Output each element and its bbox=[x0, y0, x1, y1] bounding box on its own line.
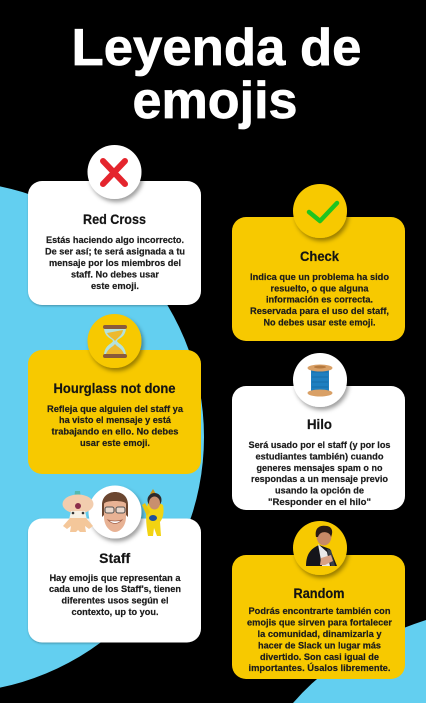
heading: Hilo: Hilo bbox=[307, 417, 332, 432]
text: Random description: emojis que sirven para fortalecer bbox=[247, 618, 392, 628]
text: Staff description: contexto, up to you. bbox=[72, 607, 158, 617]
panel: Hourglass not done bbox=[28, 314, 201, 474]
panel: Hilo bbox=[232, 353, 405, 510]
text: Hilo description: "Responder en el hilo" bbox=[268, 497, 371, 507]
icon: hourglass bbox=[103, 325, 127, 358]
text: Check description: resuelto, o que alguna bbox=[270, 284, 369, 294]
background shape: blue circle left bbox=[0, 181, 204, 693]
background shape: blue corner bottom right bbox=[293, 620, 426, 703]
icon: red cross bbox=[103, 161, 125, 184]
text: Red Cross description: Estás haciendo algo incorrecto. bbox=[46, 235, 184, 245]
text: Check description: Indica que un problema ha sido bbox=[250, 272, 389, 282]
text: Random description: importantes. Úsalos libremente. bbox=[248, 662, 390, 673]
heading: Red Cross: Red Cross bbox=[83, 212, 146, 227]
text: Red Cross description: staff. No debes usar bbox=[71, 270, 159, 280]
text: Random description: hacer de Slack un lugar más bbox=[258, 640, 381, 650]
text: Hourglass description bbox=[47, 404, 184, 448]
text: Random description: la comunidad, dinamizarla y bbox=[258, 629, 382, 639]
text: Red Cross description: De ser así; te será asignada a tu bbox=[45, 246, 185, 256]
text: Hourglass description: usar este emoji. bbox=[80, 438, 150, 448]
text: Hourglass description: trabajando en ello. No debes bbox=[52, 426, 178, 436]
title bbox=[72, 19, 362, 130]
panel: Staff bbox=[28, 486, 201, 642]
text: Hilo description: usando la opción de bbox=[275, 486, 364, 496]
icon: green check bbox=[309, 203, 337, 221]
text: Check description: Reservada para el uso del staff, bbox=[250, 306, 389, 316]
text: Hourglass description: Refleja que alguien del staff ya bbox=[47, 404, 184, 414]
text: Red Cross description: este emoji. bbox=[91, 281, 139, 291]
text: Hilo description: respondas a un mensaje previo bbox=[251, 474, 388, 484]
title: emojis bbox=[132, 72, 298, 130]
icon: banana costume character bbox=[142, 489, 164, 536]
text: Red Cross description bbox=[45, 235, 185, 291]
panel: Check bbox=[232, 184, 405, 341]
heading: Random: Random bbox=[294, 586, 344, 601]
text: Check description bbox=[250, 272, 389, 328]
text: Random description: Podrás encontrarte también con bbox=[248, 606, 391, 616]
text: Hilo description: Será usado por el staff (y por los bbox=[248, 440, 390, 450]
panel: Red Cross bbox=[28, 145, 201, 305]
icon: genie character bbox=[62, 491, 94, 532]
text: Staff description: diferentes usos según el bbox=[62, 596, 168, 606]
text: Hilo description: estudiantes también) cuando bbox=[256, 452, 384, 462]
text: Check description: información es correcta. bbox=[266, 294, 373, 304]
heading: Check: Check bbox=[300, 249, 339, 264]
text: Random description bbox=[247, 606, 392, 673]
text: Staff description: cada uno de los Staff's, tienen bbox=[49, 584, 181, 594]
text: Check description: No debes usar este emoji. bbox=[264, 318, 376, 328]
icon: staff face with glasses bbox=[102, 492, 128, 532]
icon: thread spool bbox=[308, 364, 332, 396]
panel: Random bbox=[232, 521, 405, 679]
text: Hilo description bbox=[248, 440, 390, 507]
icon: man pointing in suit bbox=[306, 526, 337, 566]
text: Random description: divertido. Son casi igual de bbox=[260, 652, 379, 662]
text: Hourglass description: ha visto el mensaje y está bbox=[59, 415, 172, 425]
text: Hilo description: generes mensajes spam o no bbox=[256, 463, 383, 473]
heading: Staff: Staff bbox=[99, 551, 131, 566]
text: Red Cross description: mensaje por los miembros del bbox=[49, 258, 181, 268]
text: Staff description: Hay emojis que representan a bbox=[50, 573, 181, 583]
title: Leyenda de bbox=[72, 19, 362, 77]
text: Staff description bbox=[49, 573, 181, 617]
heading: Hourglass not done: Hourglass not done bbox=[54, 381, 176, 396]
